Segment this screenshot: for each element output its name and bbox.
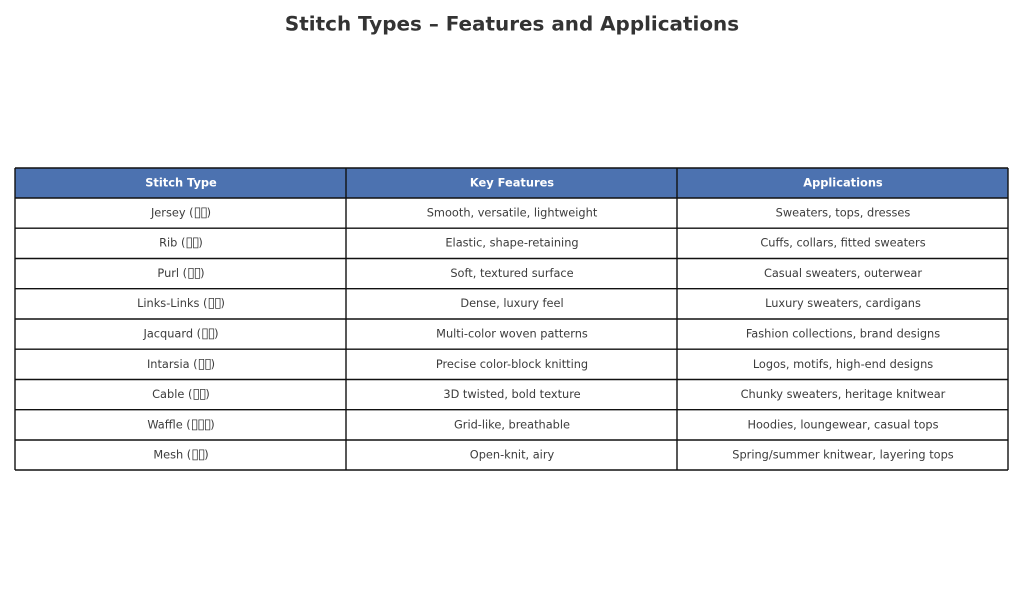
row: Jersey: Sweaters, tops, dresses [776,206,910,220]
row: Waffle: Hoodies, loungewear, casual tops [747,417,939,431]
row: Intarsia: Intarsia (▯▯) [147,356,215,372]
row: Cable [152,386,946,402]
header row [15,168,1008,198]
row: Links-Links: Luxury sweaters, cardigans [765,296,921,310]
row: Purl: Soft, textured surface [450,266,574,280]
row: Waffle: Waffle (▯▯▯) [147,416,215,432]
row: Jacquard: Multi-color woven patterns [436,327,588,341]
row: Links-Links: Dense, luxury feel [460,296,564,310]
row: Waffle: Grid-like, breathable [454,417,570,431]
row: Jacquard: Fashion collections, brand designs [746,327,940,341]
row: Mesh: Spring/summer knitwear, layering tops [732,448,954,462]
row: Rib: Rib (▯▯) [159,235,203,251]
row: Cable: 3D twisted, bold texture [443,387,581,401]
row: Rib: Cuffs, collars, fitted sweaters [760,236,926,250]
row: Jacquard [142,326,940,342]
title: Stitch Types – Features and Applications [285,12,739,36]
row: Cable: Cable (▯▯) [152,386,210,402]
row: Mesh [153,447,954,463]
row: Links-Links: Links-Links (▯▯) [137,295,225,311]
row: Intarsia [147,356,933,372]
table [15,168,1008,470]
header row: Key Features [470,176,554,190]
row: Mesh: Open-knit, airy [470,448,555,462]
row: Purl: Purl (▯▯) [157,265,205,281]
row: Jacquard: Jacquard (▯▯) [142,326,219,342]
row: Jersey: Jersey (▯▯) [150,204,211,220]
row: Jersey: Smooth, versatile, lightweight [427,206,598,220]
row: Rib: Elastic, shape-retaining [445,236,579,250]
row: Purl: Casual sweaters, outerwear [764,266,922,280]
row: Links-Links [137,295,921,311]
row: Jersey [150,204,910,220]
row: Purl [157,265,922,281]
row: Waffle [147,416,939,432]
header row: Stitch Type [145,176,217,190]
header row: Applications [803,176,883,190]
row: Rib [159,235,926,251]
row: Cable: Chunky sweaters, heritage knitwear [741,387,946,401]
row: Mesh: Mesh (▯▯) [153,447,209,463]
row: Intarsia: Precise color-block knitting [436,357,588,371]
row: Intarsia: Logos, motifs, high-end designs [753,357,933,371]
